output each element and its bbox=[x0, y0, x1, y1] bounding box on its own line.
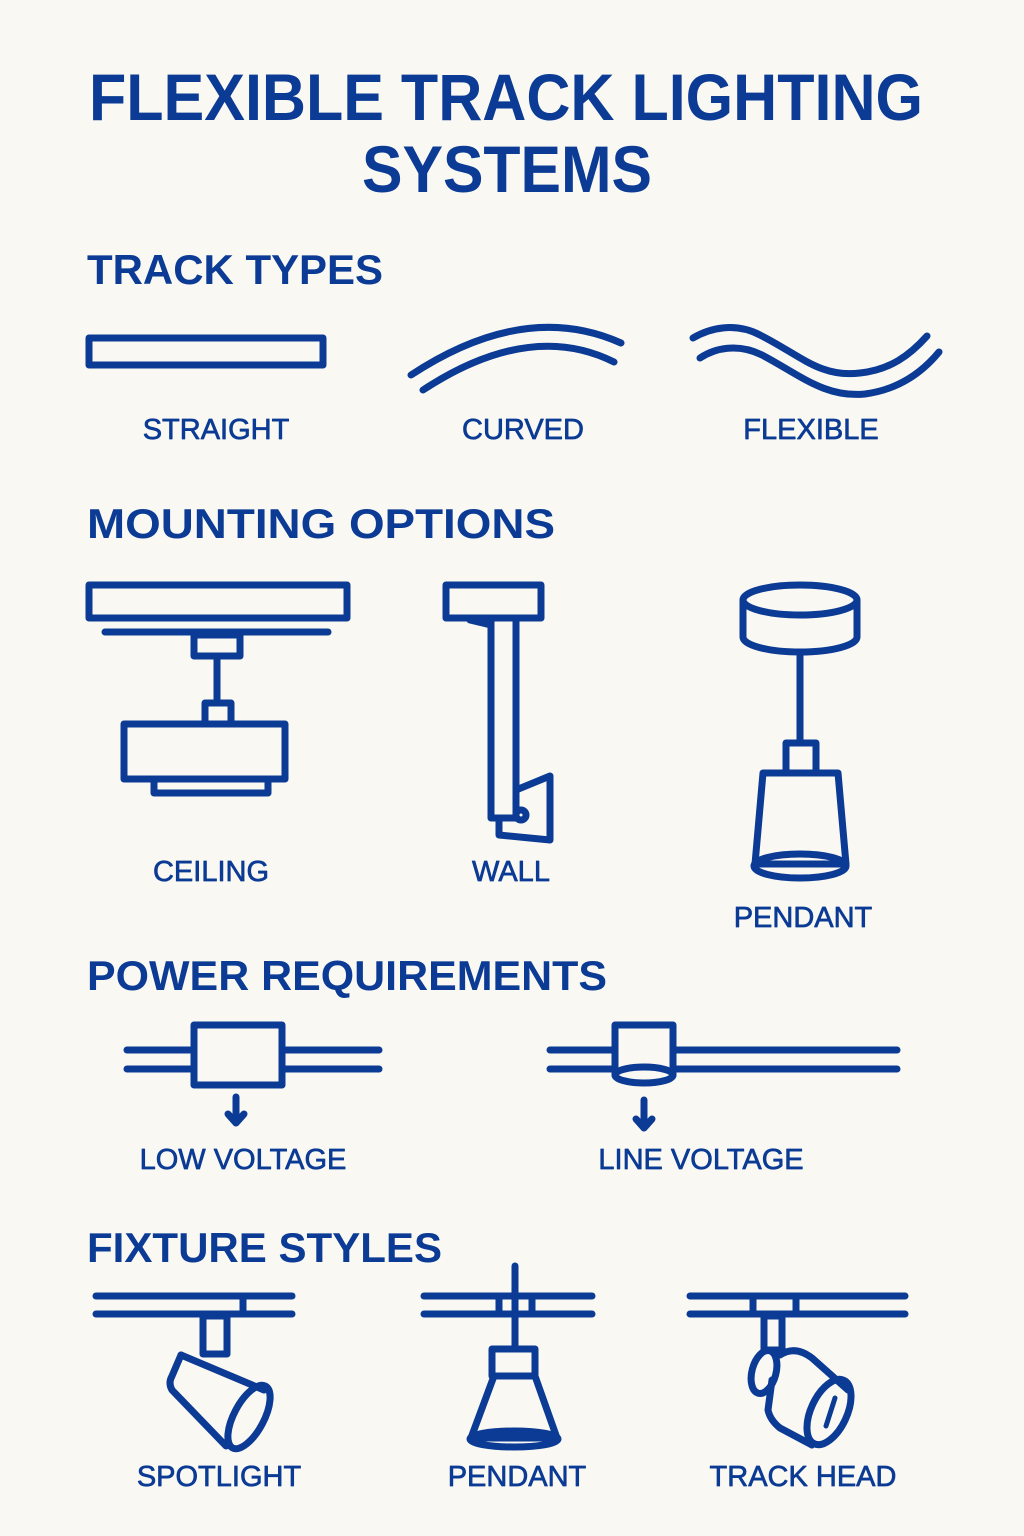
icon: flexible track bbox=[693, 328, 939, 446]
icon: spotlight bbox=[96, 1296, 301, 1493]
heading: track types: TRACK TYPES bbox=[87, 246, 383, 293]
icon: low voltage bbox=[127, 1025, 379, 1176]
icon: wall mount bbox=[446, 585, 550, 888]
icon: flexible track: FLEXIBLE bbox=[743, 414, 879, 446]
heading: mounting options: MOUNTING OPTIONS bbox=[87, 500, 555, 547]
icon: line voltage: LINE VOLTAGE bbox=[598, 1144, 804, 1176]
icon: wall mount: WALL bbox=[472, 856, 550, 888]
icon: low voltage: LOW VOLTAGE bbox=[140, 1144, 346, 1176]
icon: pendant fixture: PENDANT bbox=[448, 1461, 587, 1493]
icon: pendant fixture bbox=[424, 1266, 592, 1493]
icon: track head bbox=[690, 1296, 905, 1493]
icon: straight track bbox=[89, 338, 323, 446]
icon: straight track: STRAIGHT bbox=[143, 414, 290, 446]
icon: curved track bbox=[411, 327, 621, 446]
title: FLEXIBLE TRACK LIGHTING bbox=[89, 60, 923, 134]
icon: track head: TRACK HEAD bbox=[710, 1461, 896, 1493]
icon: line voltage bbox=[550, 1025, 897, 1176]
icon: ceiling mount bbox=[89, 585, 347, 888]
icon: spotlight: SPOTLIGHT bbox=[137, 1461, 301, 1493]
heading: fixture styles: FIXTURE STYLES bbox=[87, 1224, 442, 1271]
icon: pendant mount bbox=[734, 585, 873, 934]
icon: curved track: CURVED bbox=[462, 414, 584, 446]
icon: ceiling mount: CEILING bbox=[153, 856, 269, 888]
title: SYSTEMS bbox=[362, 132, 652, 206]
heading: power requirements: POWER REQUIREMENTS bbox=[87, 952, 607, 999]
title bbox=[89, 60, 923, 206]
icon: pendant mount: PENDANT bbox=[734, 902, 873, 934]
